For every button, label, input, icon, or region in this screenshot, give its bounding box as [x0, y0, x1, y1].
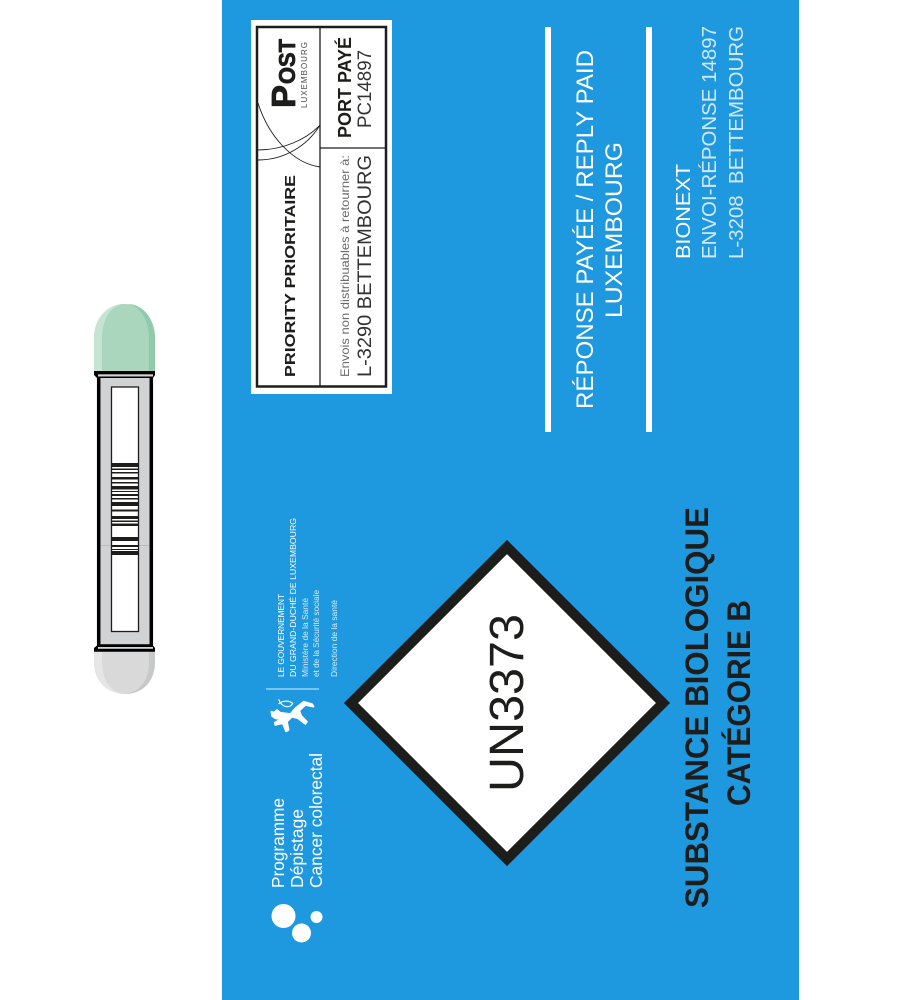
- logo: government text: DU GRAND-DUCHÉ DE LUXEMBOURG: [288, 518, 298, 677]
- text: reply paid: [572, 50, 628, 409]
- heading: substance classification: [679, 507, 757, 908]
- logo: government text: et de la Sécurité sociale: [312, 589, 321, 677]
- logo: Post Luxembourg: [265, 39, 309, 108]
- tube barcode label: [112, 387, 138, 632]
- logo: government text: LE GOUVERNEMENT: [276, 594, 286, 677]
- text: reply paid: RÉPONSE PAYÉE / REPLY PAID: [572, 50, 599, 409]
- panel: postal indicia: [251, 20, 392, 394]
- logo: government text: [276, 518, 339, 677]
- text: reply paid: LUXEMBOURG: [601, 142, 628, 318]
- text: recipient address: [673, 26, 748, 259]
- logo: programme name: Programme: [268, 798, 288, 888]
- text: permit number: PC14897: [355, 50, 376, 128]
- tube collars: [94, 371, 155, 652]
- logo: programme name: Dépistage: [287, 809, 307, 888]
- text: recipient address: BIONEXT: [673, 164, 695, 259]
- illustration: sample tube: [94, 304, 155, 694]
- logo: Post Luxembourg: LUXEMBOURG: [300, 42, 309, 108]
- icon: UN3373 diamond: [351, 547, 663, 859]
- text: UN3373: UN3373: [481, 614, 534, 792]
- heading: substance classification: CATÉGORIE B: [720, 600, 757, 806]
- logo: programme name: Cancer colorectal: [306, 753, 326, 888]
- text: priority: PRIORITY PRIORITAIRE: [282, 175, 299, 377]
- divider: right white bar: [646, 27, 652, 432]
- text: port payé: PORT PAYÉ: [334, 37, 355, 138]
- divider: government logo rule: [266, 688, 319, 690]
- text: recipient address: ENVOI-RÉPONSE 14897: [698, 26, 721, 259]
- logo: programme name: [268, 753, 326, 888]
- heading: substance classification: SUBSTANCE BIOLOGIQUE: [679, 507, 715, 908]
- text: recipient address: L-3208 BETTEMBOURG: [726, 26, 748, 259]
- text: return address: L-3290 BETTEMBOURG: [355, 155, 376, 377]
- tube green cap: [94, 304, 155, 371]
- divider: left white bar: [545, 27, 551, 432]
- panel: blue envelope: [222, 0, 799, 1000]
- logo: government text: Ministère de la Santé: [301, 597, 310, 677]
- logo: government text: Direction de la santé: [330, 599, 339, 677]
- logo: Post Luxembourg: P: [265, 85, 302, 108]
- text: undeliverable notice: Envois non distribuables à retourner à:: [338, 155, 352, 377]
- tube grey cap: [94, 651, 155, 694]
- icon: three circles: [272, 904, 322, 942]
- icon: red lion: [271, 699, 314, 731]
- tube body: [99, 376, 151, 646]
- logo: Post Luxembourg: OST: [274, 39, 300, 84]
